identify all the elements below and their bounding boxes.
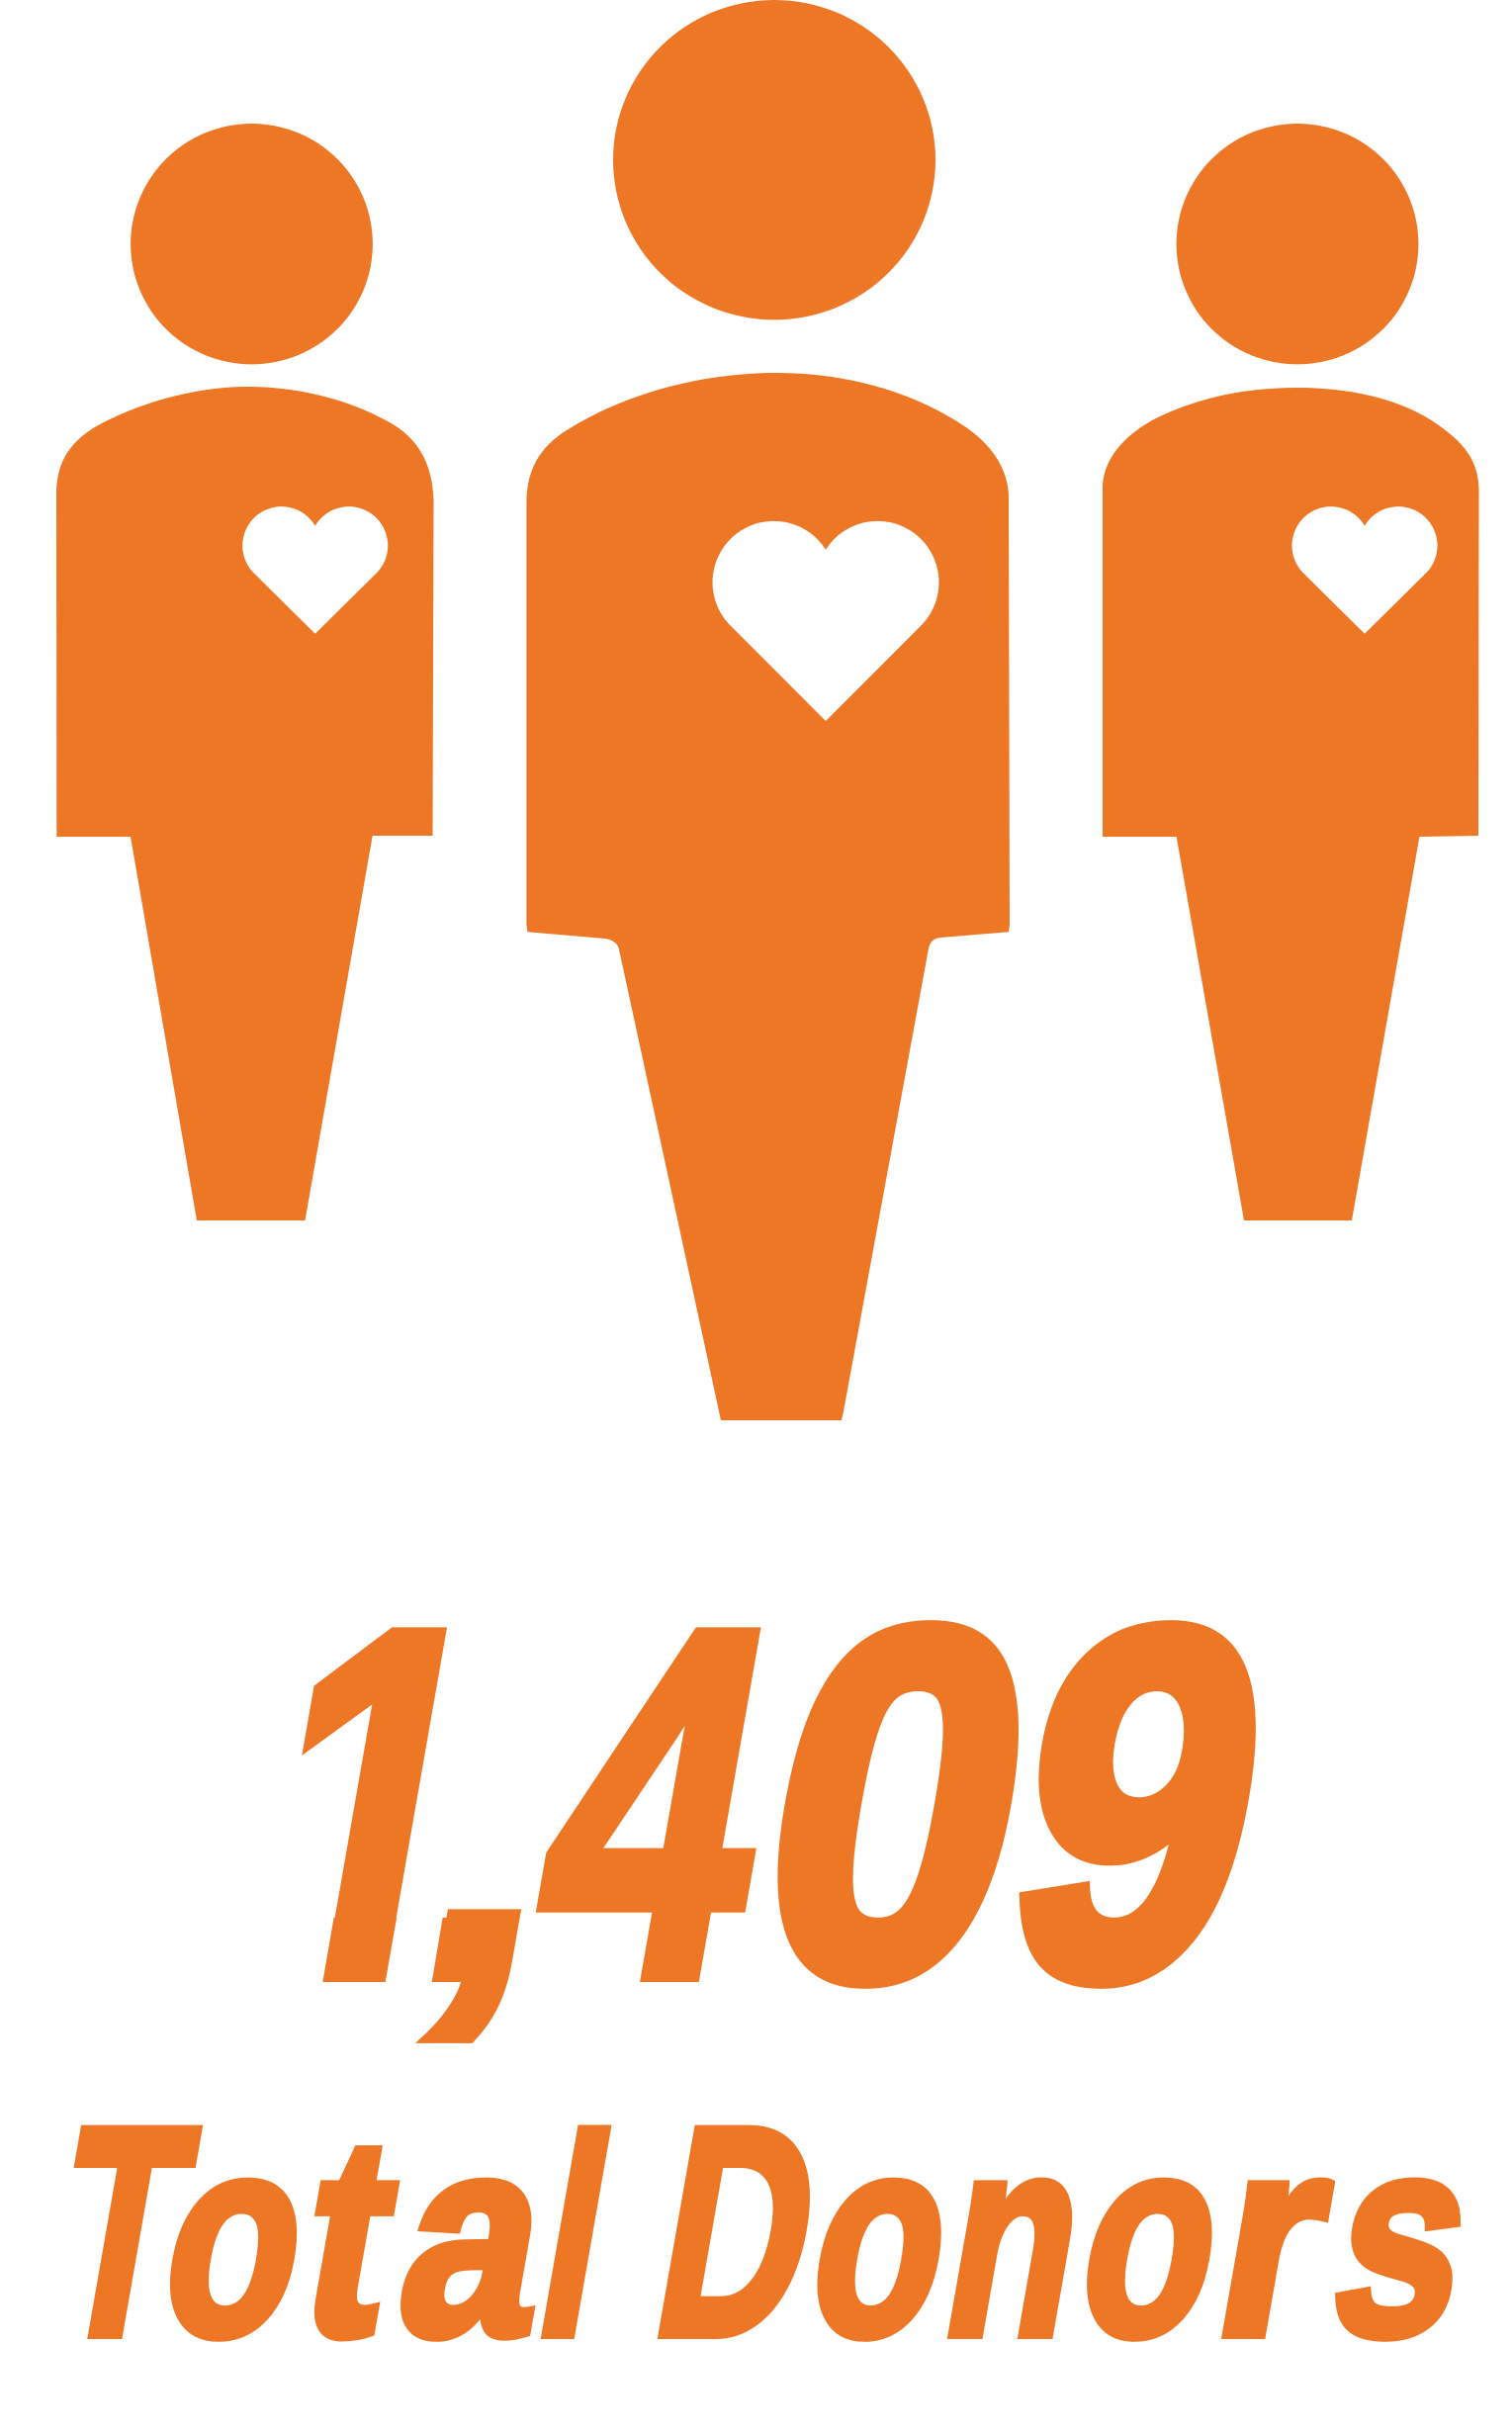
big number: 1,409: 1 — [224, 1526, 528, 2080]
right figure head — [1177, 124, 1418, 364]
right figure heart — [1291, 506, 1438, 634]
icon: left donor figure — [56, 124, 433, 1220]
big number: 1,409: , — [400, 1617, 593, 2059]
icon: right donor figure — [1103, 124, 1479, 1220]
right figure body — [1103, 388, 1479, 1220]
center figure body — [526, 373, 1010, 1420]
label: Total Donors: l — [521, 2079, 630, 2394]
label: Total Donors: r — [1199, 2079, 1353, 2394]
label: Total Donors: o — [792, 2079, 975, 2394]
center figure heart — [713, 521, 938, 721]
label: Total Donors: s — [1314, 2079, 1493, 2394]
big number: 1,409: 0 — [727, 1526, 1070, 2080]
label: Total Donors: D — [637, 2066, 841, 2397]
label: Total Donors: T — [35, 2066, 213, 2397]
label: Total Donors: t — [285, 2079, 418, 2394]
icon: center donor figure — [526, 0, 1010, 1420]
label: Total Donors: o — [144, 2079, 330, 2394]
label: Total Donors: n — [927, 2079, 1108, 2394]
left figure body — [56, 387, 433, 1220]
center figure head — [613, 0, 935, 319]
label: Total Donors: o — [1061, 2079, 1246, 2394]
left figure heart — [242, 506, 388, 634]
label: Total Donors: a — [381, 2079, 572, 2394]
left figure head — [131, 124, 373, 364]
big number: 1,409 — [224, 1526, 1304, 2080]
big number: 1,409: 9 — [976, 1526, 1304, 2080]
big number: 1,409: 4 — [506, 1526, 812, 2080]
